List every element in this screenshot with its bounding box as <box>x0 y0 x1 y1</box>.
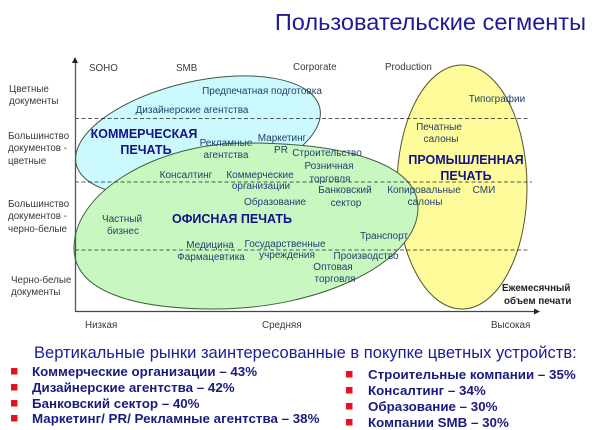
left list <box>11 364 320 426</box>
market labels: бизнес <box>107 225 139 237</box>
market labels: Маркетинг <box>258 133 307 144</box>
y axis labels: документы <box>11 287 60 298</box>
axis title: monthly print volume: Ежемесячный <box>502 283 570 294</box>
right list: Строительные компании – 35% <box>368 367 576 382</box>
ellipse: commercial print <box>64 55 332 217</box>
left list: Маркетинг/ PR/ Рекламные агентства – 38% <box>32 411 320 426</box>
market labels: торговля <box>310 174 350 185</box>
x axis labels <box>85 320 530 331</box>
left list: Коммерческие организации – 43% <box>32 364 257 379</box>
market labels: СМИ <box>473 185 495 196</box>
y axis labels: Черно-белые <box>11 275 72 286</box>
market labels: Консалтинг <box>160 170 213 181</box>
segment heading: industrial print: ПЕЧАТЬ <box>440 169 492 183</box>
dashed level lines <box>75 118 532 250</box>
market labels: учреждения <box>259 250 315 261</box>
market labels: салоны <box>408 197 442 208</box>
segment heading: commercial print: КОММЕРЧЕСКАЯ <box>91 127 197 141</box>
market labels: торговля <box>315 274 355 285</box>
y axis labels: Цветные <box>9 84 49 95</box>
y axis labels: Большинство <box>8 131 70 142</box>
right list <box>346 367 576 430</box>
market labels: Государственные <box>244 239 326 250</box>
market labels: организации <box>232 181 290 192</box>
right list: Компании SMB – 30% <box>368 415 509 430</box>
segment heading: commercial print: ПЕЧАТЬ <box>120 143 172 157</box>
axis title: monthly print volume: объем печати <box>504 296 571 307</box>
y axis labels: документов - <box>8 211 67 222</box>
y axis labels: Большинство <box>8 199 70 210</box>
market labels: Типографии <box>469 93 525 105</box>
ellipse: industrial print <box>397 65 527 309</box>
segment heading: industrial print <box>408 153 524 183</box>
axis title: monthly print volume <box>502 283 571 307</box>
market labels: агентства <box>204 150 249 161</box>
segment heading: commercial print <box>91 127 197 157</box>
vertical axis arrow <box>72 57 78 311</box>
market labels: Розничная <box>304 161 354 172</box>
left list: Дизайнерские агентства – 42% <box>32 380 235 395</box>
horizontal axis arrow <box>75 308 540 314</box>
market labels: Медицина <box>186 240 234 251</box>
market labels: Оптовая <box>313 262 353 273</box>
top segment labels: Corporate <box>293 62 337 73</box>
segment heading: office print: ОФИСНАЯ ПЕЧАТЬ <box>172 212 292 226</box>
segment heading: industrial print: ПРОМЫШЛЕННАЯ <box>408 153 524 167</box>
y axis labels: цветные <box>8 156 47 167</box>
right list: Консалтинг – 34% <box>368 383 486 398</box>
market labels: Частный <box>102 214 142 225</box>
market labels: Образование <box>244 196 306 208</box>
ellipse: office print <box>74 143 418 309</box>
market labels: Печатные <box>416 122 462 133</box>
y axis labels: черно-белые <box>8 224 68 235</box>
market labels: Предпечатная подготовка <box>202 86 322 97</box>
market labels: Дизайнерские агентства <box>136 105 249 116</box>
x axis labels: Высокая <box>491 320 530 331</box>
right list: Образование – 30% <box>368 399 498 414</box>
top segment labels <box>89 62 432 74</box>
x axis labels: Средняя <box>262 320 302 331</box>
y axis labels: документы <box>9 96 58 107</box>
chart: user segments <box>8 55 571 331</box>
market labels: Транспорт <box>360 231 408 242</box>
title: Пользовательские сегменты <box>275 9 586 35</box>
market labels: Производство <box>333 251 399 262</box>
market labels: салоны <box>424 134 458 145</box>
market labels: Фармацевтика <box>177 252 245 263</box>
left list: Банковский сектор – 40% <box>32 396 200 411</box>
market labels: PR <box>274 145 288 156</box>
top segment labels: SMB <box>176 63 198 74</box>
x axis labels: Низкая <box>85 320 117 331</box>
y axis labels <box>8 84 72 298</box>
market labels: сектор <box>331 198 362 209</box>
market labels: Строительство <box>292 148 362 159</box>
market labels: Копировальные <box>387 185 461 196</box>
market labels: Рекламные <box>200 138 253 149</box>
y axis labels: документов - <box>8 143 67 154</box>
subheading: vertical markets: Вертикальные рынки заинтересованные в покупке цветных устройств: <box>34 343 577 362</box>
top segment labels: SOHO <box>89 63 118 74</box>
market labels: Банковский <box>318 185 372 196</box>
top segment labels: Production <box>385 62 432 73</box>
market labels <box>102 86 525 285</box>
market labels: Коммерческие <box>226 170 294 181</box>
